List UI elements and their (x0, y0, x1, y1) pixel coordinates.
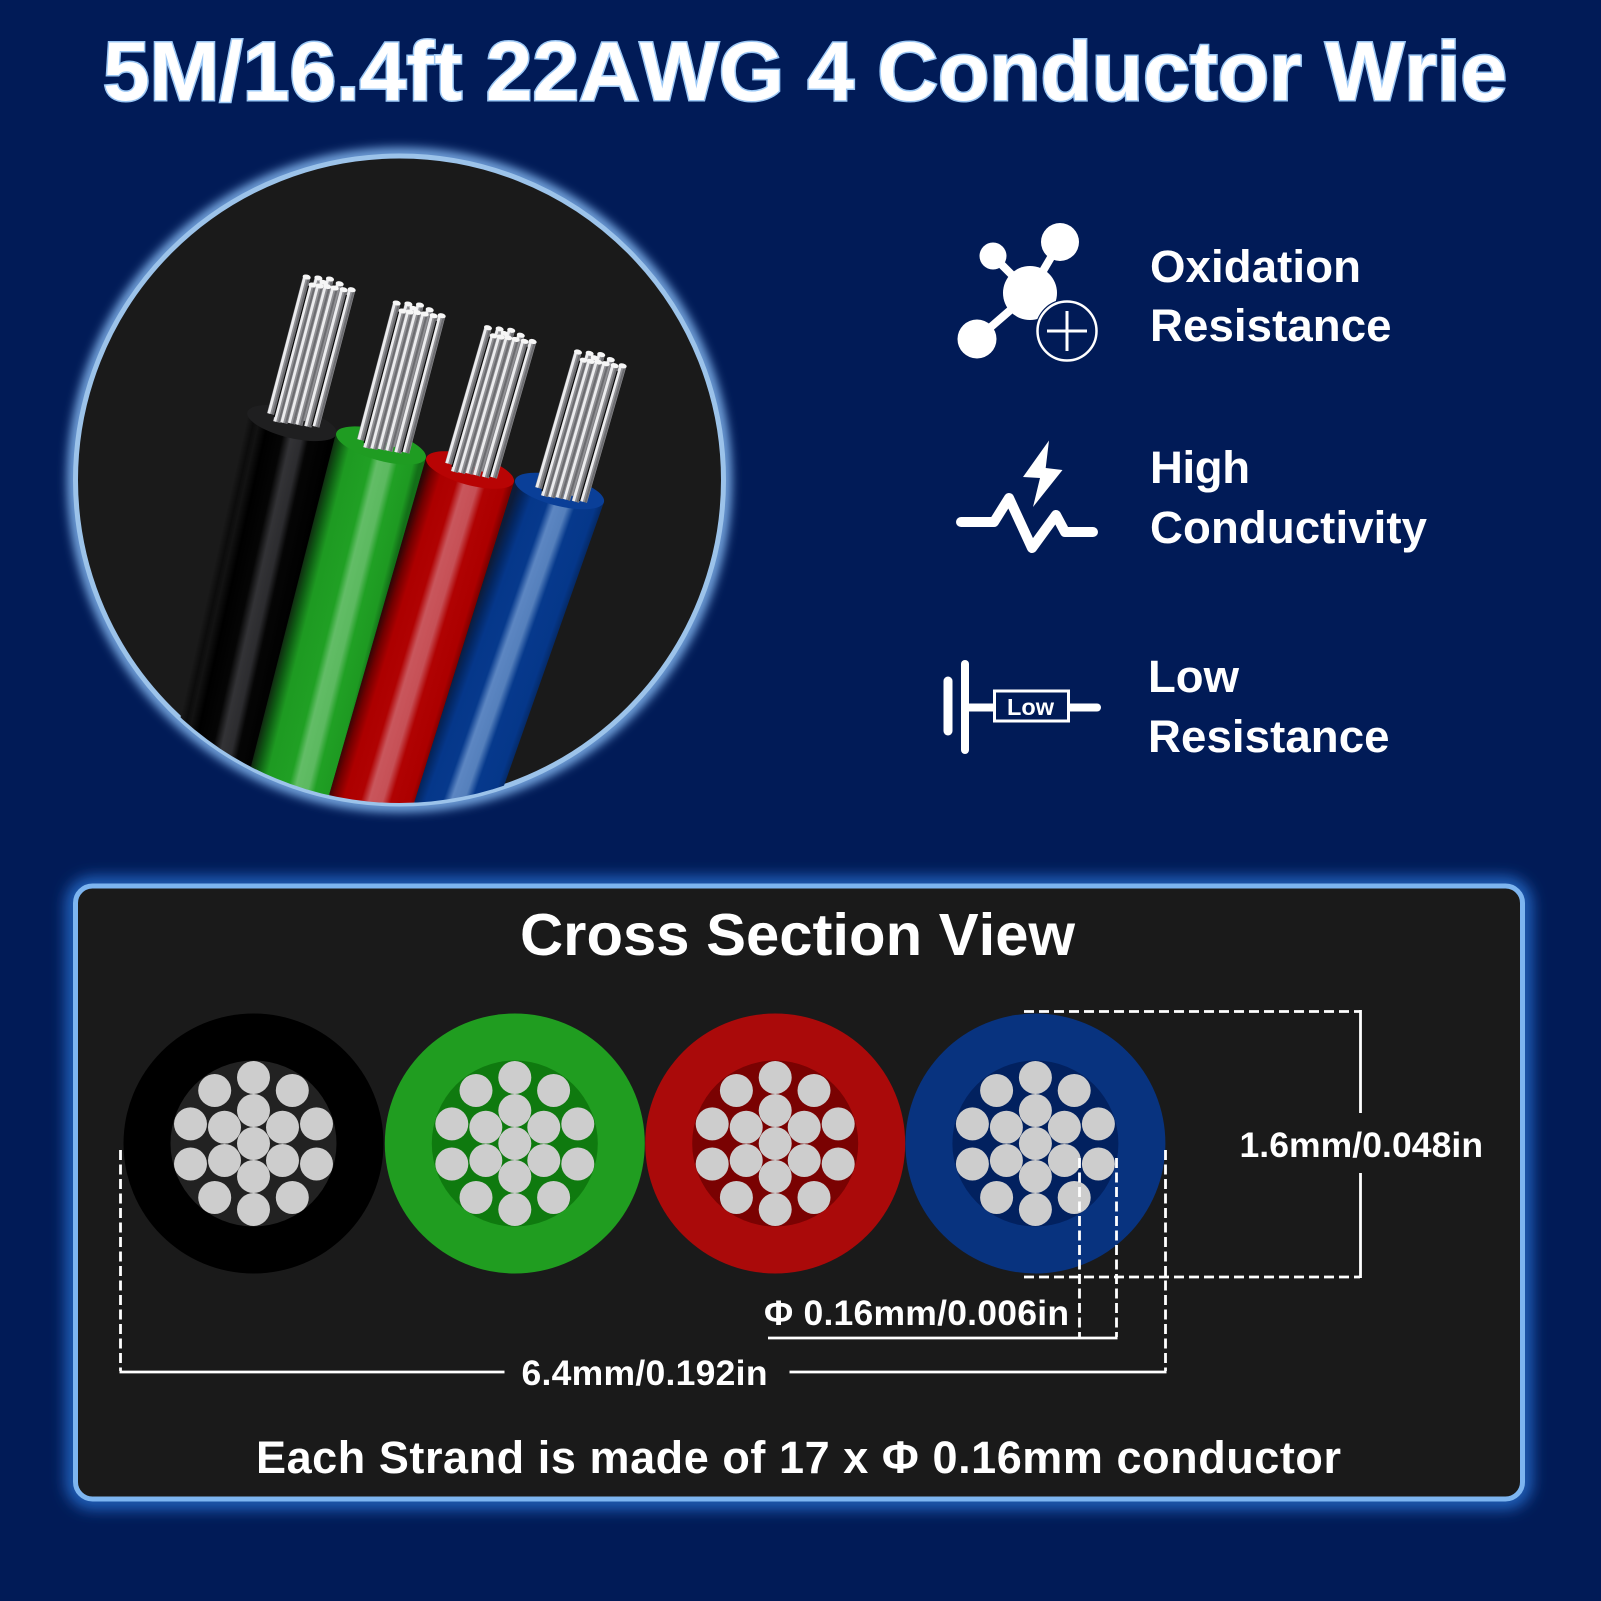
dimension: wire diameter 1.6mm (1024, 1010, 1483, 1278)
cable section: black (124, 1014, 384, 1274)
green wire (250, 300, 446, 796)
text: oxidation resistance: Resistance (1150, 300, 1392, 351)
icon: molecule with plus (958, 223, 1099, 363)
cable section: red (645, 1014, 905, 1274)
text: oxidation resistance (1150, 241, 1392, 351)
dimension: conductor diameter 0.16mm (764, 1158, 1118, 1338)
dimension: conductor diameter 0.16mm: Φ 0.16mm/0.006in (764, 1293, 1069, 1333)
cable section: green (385, 1014, 645, 1274)
title: 5M/16.4ft 22AWG 4 Conductor Wrie (103, 24, 1507, 118)
feature: oxidation resistance (958, 223, 1392, 363)
wires: black, green, red, blue (180, 274, 627, 803)
feature: low resistance (948, 651, 1390, 762)
dimension: wire diameter 1.6mm: 1.6mm/0.048in (1240, 1125, 1483, 1165)
icon: low resistance circuit: Low (1007, 694, 1055, 720)
text: low resistance: Resistance (1148, 711, 1390, 762)
dimension: overall width 6.4mm (120, 1150, 1166, 1393)
text: oxidation resistance: Oxidation (1150, 241, 1361, 292)
panel: cross section view (74, 885, 1524, 1501)
icon: low resistance circuit (948, 664, 1101, 750)
panel: wire close-up lens (74, 154, 726, 902)
cable section: blue (905, 1014, 1165, 1274)
text: high conductivity (1150, 442, 1428, 553)
text: high conductivity: Conductivity (1150, 502, 1428, 553)
feature: high conductivity (961, 440, 1428, 553)
text: low resistance (1148, 651, 1390, 762)
heading: cross section view: Cross Section View (520, 901, 1075, 968)
caption: strand composition: Each Strand is made of 17 x Φ 0.16mm conductor (256, 1432, 1341, 1483)
dimension: overall width 6.4mm: 6.4mm/0.192in (522, 1353, 768, 1393)
text: high conductivity: High (1150, 442, 1250, 493)
text: low resistance: Low (1148, 651, 1240, 702)
black wire (180, 274, 356, 770)
red wire (329, 325, 537, 803)
icon: lightning and pulse (961, 440, 1093, 548)
blue wire (414, 349, 627, 803)
